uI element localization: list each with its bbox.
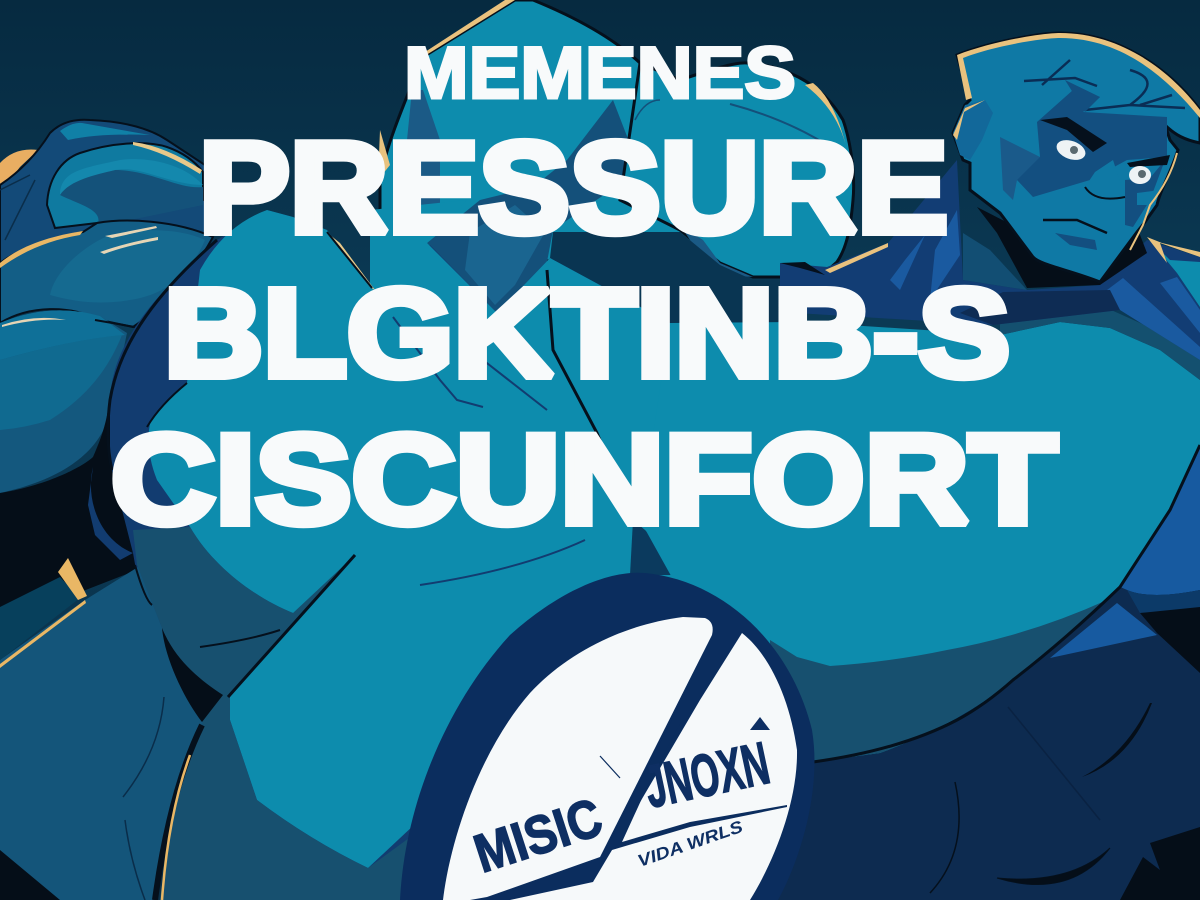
badge: VIDA WRLS	[635, 817, 746, 871]
title line 1: PRESSURE	[199, 116, 948, 260]
badge word right: JNOXN	[639, 729, 775, 821]
right torso	[640, 322, 1200, 762]
black shadow left	[0, 393, 140, 660]
nose	[1083, 160, 1125, 203]
face shadows	[1000, 137, 1040, 200]
subtitle line: MEMENES	[404, 33, 796, 114]
mouth	[1043, 220, 1107, 233]
collar and shoulder	[780, 160, 1200, 380]
icon: face	[953, 33, 1200, 288]
badge wordmark	[467, 729, 775, 884]
left figure arms	[0, 120, 213, 493]
eyes	[1054, 136, 1088, 164]
title	[111, 33, 1057, 550]
central dark gap	[550, 232, 830, 323]
ear	[953, 100, 993, 160]
badge white left	[443, 617, 713, 900]
badge	[400, 573, 814, 900]
badge word left: MISIC	[467, 787, 609, 884]
second top blob	[620, 63, 854, 277]
central head shapes	[378, 0, 700, 313]
badge slash	[600, 720, 787, 860]
title line 2: BLGKTINB-S	[164, 264, 1010, 403]
right arm blue	[1120, 445, 1200, 595]
hair strokes	[1024, 60, 1185, 110]
central torso left	[88, 200, 800, 900]
brows	[1040, 117, 1107, 152]
lower right navy	[770, 587, 1200, 900]
lower left thigh	[0, 527, 420, 900]
badge white right	[510, 633, 797, 900]
title line 3: CISCUNFORT	[111, 408, 1057, 550]
